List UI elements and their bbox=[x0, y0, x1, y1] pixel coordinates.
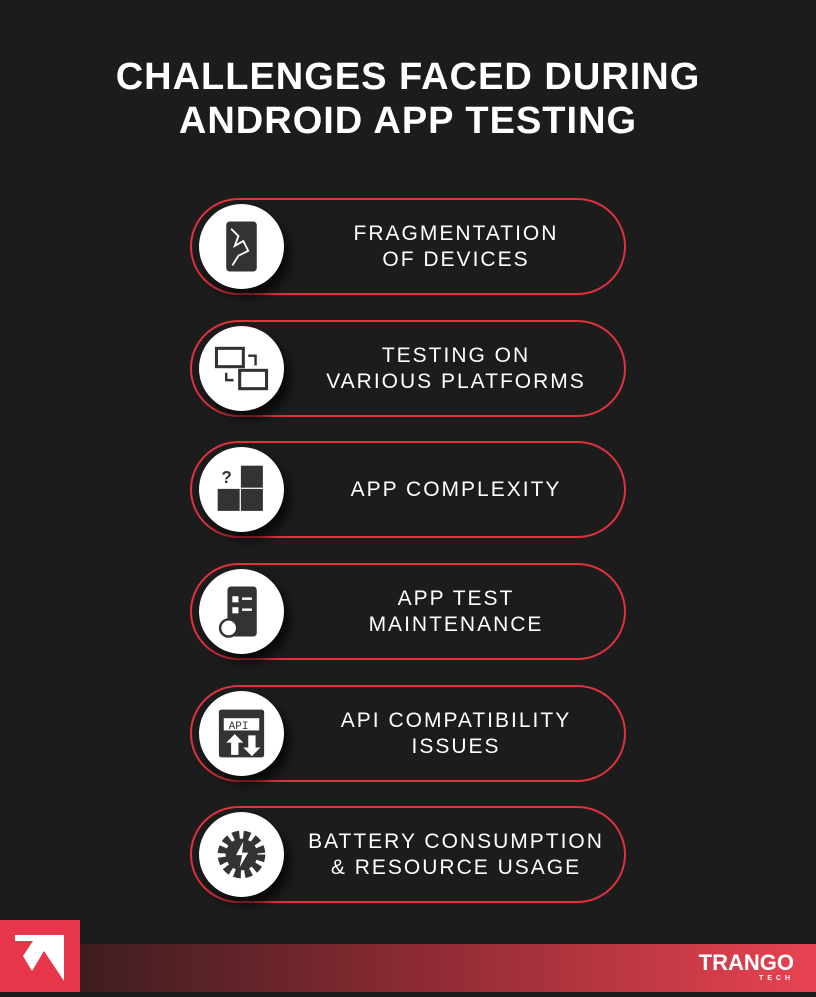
text bbox=[340, 708, 571, 758]
text: APP TEST bbox=[398, 586, 514, 610]
panel: fragmentation bbox=[190, 198, 626, 295]
text: MAINTENANCE bbox=[369, 612, 543, 636]
icon: cracked phone bbox=[199, 204, 284, 289]
icon: windows bbox=[199, 326, 284, 411]
text: ISSUES bbox=[411, 734, 501, 758]
text: VARIOUS PLATFORMS bbox=[326, 370, 586, 392]
text: FRAGMENTATION bbox=[354, 222, 558, 244]
text bbox=[326, 344, 586, 392]
icon: gear bolt bbox=[199, 812, 284, 897]
title: CHALLENGES FACED DURING bbox=[116, 56, 700, 98]
icon: api window: API bbox=[229, 721, 248, 733]
icon: puzzle: ? bbox=[221, 468, 232, 487]
icon: api window bbox=[199, 691, 284, 776]
text: TESTING ON bbox=[382, 344, 530, 366]
text: OF DEVICES bbox=[382, 248, 530, 270]
text: BATTERY CONSUMPTION bbox=[308, 830, 604, 852]
text bbox=[369, 586, 543, 636]
icon: checklist phone bbox=[199, 569, 284, 654]
logo text: TECH bbox=[759, 975, 794, 982]
logo mark bbox=[0, 920, 80, 992]
text bbox=[354, 222, 558, 270]
logo text: TRANGO bbox=[699, 950, 794, 975]
panel: battery bbox=[190, 806, 626, 903]
panel: platforms bbox=[190, 320, 626, 417]
text: & RESOURCE USAGE bbox=[331, 856, 581, 878]
panel: api bbox=[190, 685, 626, 782]
title bbox=[116, 56, 700, 142]
panel: complexity bbox=[190, 441, 626, 538]
panel: maintenance bbox=[190, 563, 626, 660]
icon: puzzle bbox=[199, 447, 284, 532]
text: API COMPATIBILITY bbox=[341, 708, 571, 732]
footer bar bbox=[0, 944, 816, 992]
title: ANDROID APP TESTING bbox=[179, 100, 637, 142]
text: APP COMPLEXITY bbox=[351, 478, 561, 500]
text bbox=[308, 830, 604, 878]
